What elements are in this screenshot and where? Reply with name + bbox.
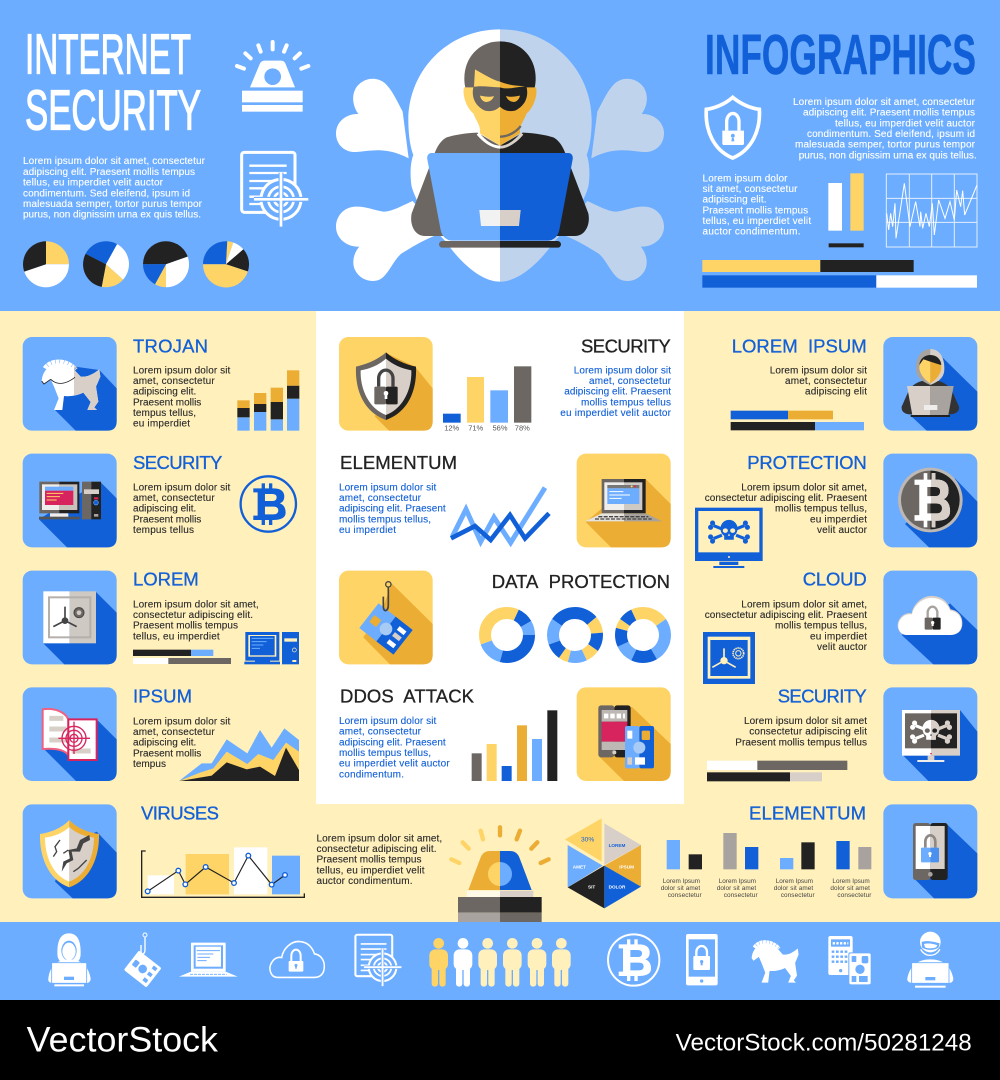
header left paragraph: Lorem ipsum dolor sit amet, consectetur [23,156,206,167]
text: Security centre: amet, consectetur [589,376,672,387]
text: Lorem Ipsum: amet, consectetur [785,376,868,387]
centre white panel [316,311,684,804]
progress bars: Lorem Ipsum [731,411,864,430]
hexagon diagram: DOLOR [609,884,626,889]
chart captions: consectetur [724,892,759,899]
text: Cloud: mollis tempus tellus, [775,621,867,632]
icon: hook and card white [124,933,162,988]
header right paragraph [793,97,977,161]
header small paragraph: adipiscing elit. [702,195,766,206]
heading: Elementum right: ELEMENTUM [749,802,866,823]
text: Elementum: adipiscing elit. Praesent [339,504,446,515]
text: Lorem Ipsum [770,365,868,398]
text: Lorem Ipsum: adipiscing elit [805,387,867,398]
hexagon diagram: IPSUM [619,865,634,870]
heading: Data Protection: DATA PROTECTION [492,571,670,592]
text: DDoS Attack: mollis tempus tellus, [339,748,431,759]
header left paragraph: malesuada semper, tortor purus tempor [23,199,203,210]
text: Security right: Praesent mollis tempus tellus [735,737,867,748]
text: Lorem Ipsum: Lorem ipsum dolor sit [770,365,867,376]
title: Internet Security: SECURITY [25,78,201,142]
text: DDoS Attack: eu imperdiet velit auctor [339,759,450,770]
text: Lorem: Lorem ipsum dolor sit amet, [133,599,259,610]
header small paragraph: Lorem ipsum dolor [702,173,788,184]
icon: blue desktop computer [244,632,299,664]
text: Trojan: adipiscing elit. [133,387,196,398]
icon tile: trojan horse [23,337,117,431]
icon: bitcoin white [608,934,659,986]
text: Protection: eu imperdiet [810,514,867,525]
icon: bitcoin outline [241,476,296,532]
header small paragraph: tellus, eu imperdiet velit [702,216,811,227]
header small paragraph: auctor condimentum. [702,227,800,238]
combo chart: bars and line [142,847,304,897]
heading: Lorem: LOREM [133,569,199,590]
zigzag line chart [451,488,549,543]
text: Cloud: velit auctor [817,642,868,653]
icon: laptop white [179,943,238,977]
bar chart with percentages: 78% [515,424,530,433]
header right paragraph: malesuada semper, tortor purus tempor [795,140,976,151]
panel: centre column [339,335,672,781]
panel: bottom strip [316,818,872,922]
chart captions: Lorem Ipsum [719,878,756,885]
text: Trojan: tempus tellus, [133,408,196,419]
donut charts [485,613,665,657]
heading: Ipsum: IPSUM [133,686,192,707]
heading: Viruses: VIRUSES [141,802,219,823]
bar chart with percentages: 71% [468,424,484,433]
heading: Elementum: ELEMENTUM [340,452,457,473]
text: Lorem: consectetur adipiscing elit. [133,610,253,621]
icon: shield with padlock [706,97,759,158]
middle cream panel [0,311,1000,922]
area chart [179,728,299,781]
icon tile: book with target [23,687,117,781]
people row [429,938,571,987]
text: Trojan: Lorem ipsum dolor sit [133,365,231,376]
text: Security right: Lorem ipsum dolor sit amet [744,716,867,727]
header line chart [886,174,977,247]
icon: monitor with skull [695,508,763,568]
text: Lorem: tellus, eu imperdiet [133,631,220,642]
footer icons [48,932,953,988]
icon tile: cloud with lock [883,571,977,664]
text: Ipsum [133,716,231,770]
heading: DDoS Attack: DDOS ATTACK [340,686,475,707]
footer icon strip panel [0,922,1000,1000]
hexagon diagram: LOREM [609,843,626,848]
icon tile: laptop [577,454,671,547]
grouped bar chart [667,833,871,869]
text: Security: adipiscing elit. [133,504,196,515]
icon: phone lock white [686,934,718,985]
pie charts row [23,241,249,287]
text: Cloud: eu imperdiet [810,631,867,642]
header right paragraph: condimentum. Sed eleifend, ipsum id [807,129,975,140]
progress bars: Lorem [133,650,231,664]
text: Security right: consectetur adipiscing elit [749,727,867,738]
heading: Cloud: CLOUD [803,569,867,590]
icon: document with target [242,152,308,227]
text: Trojan: Praesent mollis [133,397,201,408]
text: Trojan: amet, consectetur [133,376,215,387]
stacked bar chart [237,370,299,431]
text: bottom paragraph: Praesent mollis tempus [316,855,422,866]
chart captions: dolor sit amet [661,885,700,892]
header small paragraph: Praesent mollis tempus [702,205,808,216]
text: Trojan: eu imperdiet [133,419,190,430]
icon tile: cracked shield [23,804,117,898]
icon tile: desktop computer [23,454,117,547]
text: Cloud: Lorem ipsum dolor sit amet, [741,599,867,610]
text: Security centre: mollis tempus tellus [581,397,671,408]
header right paragraph: purus, non dignissim urna ex quis tellus. [799,150,977,161]
icon tile: safe [23,571,117,664]
icon: hooded hacker white [48,933,91,986]
text: Protection [705,482,868,536]
panel: left column [23,335,304,898]
text: Lorem: Praesent mollis tempus [133,621,238,632]
text: Elementum: Lorem ipsum dolor sit [339,482,437,493]
header small paragraph: sit amet, consectetur [702,184,798,195]
header right paragraph: Lorem ipsum dolor sit amet, consectetur [793,97,976,108]
text: Ipsum: Praesent mollis [133,748,201,759]
icon tile: phone with lock [883,804,977,898]
icon: coloured siren [451,827,549,922]
chart captions: Lorem Ipsum [776,878,813,885]
text: bottom paragraph: auctor condimentum. [316,876,412,887]
text: Ipsum: Lorem ipsum dolor sit [133,716,231,727]
heading: Protection: PROTECTION [747,452,867,473]
text: Security centre [560,365,672,419]
title: Internet Security: INTERNET [25,22,191,86]
header left paragraph: tellus, eu imperdiet velit auctor [23,178,164,189]
header bar chart [828,173,864,247]
header left paragraph: adipiscing elit. Praesent mollis tempus [23,167,195,178]
title: Internet Security [25,22,201,142]
chart captions: consectetur [781,892,816,899]
bar chart with percentages [443,366,531,433]
progress bars: Security right [707,761,847,781]
text: DDoS Attack: adipiscing elit. Praesent [339,737,446,748]
header background panel [0,0,1000,311]
icon tile: bitcoin coin [883,454,977,547]
text: Protection: consectetur adipiscing elit. Praesent [705,493,867,504]
text: Security: Lorem ipsum dolor sit [133,482,231,493]
text: bottom paragraph [316,833,442,887]
header left paragraph [23,156,206,221]
text: Security centre: adipiscing elit. Praesent [564,387,671,398]
header small paragraph [702,173,811,238]
icon: alarm siren white [237,42,308,112]
watermark: image id: VectorStock.com/50281248 [676,1030,972,1057]
heading: Security centre: SECURITY [581,335,671,356]
text: Security: tempus tellus [133,525,194,536]
text: Elementum: mollis tempus tellus, [339,514,431,525]
icon tile: monitor with skull [883,687,977,781]
chart captions: dolor sit amet [717,885,756,892]
text: DDoS Attack: amet, consectetur [339,727,422,738]
chart captions: Lorem Ipsum [663,878,700,885]
text: Protection: mollis tempus tellus, [775,504,867,515]
text: Security [133,482,231,536]
laptop [427,153,573,248]
icon tile: shield with lock [339,337,433,431]
text: Ipsum: adipiscing elit. [133,738,196,749]
text: Ipsum: tempus [133,759,166,770]
text: Trojan [133,365,231,430]
icon tile: hooded hacker [883,337,977,431]
icon: blue safe [703,632,755,684]
icon: phone and card white [828,936,872,985]
skull and crossbones backdrop [336,29,664,282]
heading: Trojan: TROJAN [133,335,208,356]
watermark: brand: VectorStock [27,1021,219,1060]
text: DDoS Attack: condimentum. [339,769,404,780]
text: Security: amet, consectetur [133,493,215,504]
text: bottom paragraph: consectetur adipiscing elit. [316,844,436,855]
header horizontal bars [702,260,977,288]
text: Security centre: Lorem ipsum dolor sit [574,365,671,376]
bar chart: DDoS [472,710,557,781]
chart captions: dolor sit amet [774,885,813,892]
text: Security: Praesent mollis [133,514,201,525]
text: DDoS Attack [339,716,450,780]
icon: trojan horse white [752,943,799,983]
text: Security right [735,716,867,748]
icon: cloud lock outline [270,942,324,977]
chart captions: consectetur [837,892,872,899]
chart captions: Lorem Ipsum [832,878,870,885]
heading: Lorem Ipsum: LOREM IPSUM [732,335,867,356]
icon: document target small [355,935,401,986]
text: Ipsum: amet, consectetur [133,727,215,738]
icon tile: phishing hook with card [339,571,433,664]
text: Cloud [705,599,868,653]
text: Cloud: consectetur adipiscing elit. Praesent [705,610,867,621]
panel: right column [695,335,977,898]
text: Elementum: amet, consectetur [339,493,422,504]
icon tile: phone and card [577,687,671,781]
bar chart with percentages: 12% [444,424,460,433]
text: Elementum [339,482,446,536]
text: bottom paragraph: Lorem ipsum dolor sit amet, [316,833,442,844]
header right paragraph: tellus, eu imperdiet velit auctor [835,118,976,129]
text: DDoS Attack: Lorem ipsum dolor sit [339,716,437,727]
hexagon diagram [565,818,641,908]
heading: Security: SECURITY [133,452,222,473]
text: Protection: velit auctor [817,525,868,536]
hacker figure [411,41,589,236]
text: Protection: Lorem ipsum dolor sit amet, [741,482,867,493]
heading: Security right: SECURITY [778,686,867,707]
hexagon diagram: AMET [573,865,586,870]
central hacker over skull and crossbones [336,29,664,282]
icon: masked hacker white [907,932,953,988]
bar chart with percentages: 56% [492,424,508,433]
text: Lorem [133,599,259,642]
hexagon diagram: 30% [581,836,594,843]
chart captions: consectetur [668,892,703,899]
chart captions [661,878,872,899]
chart captions: dolor sit amet [830,885,870,892]
text: Elementum: eu imperdiet [339,525,396,536]
text: Security centre: eu imperdiet velit auctor [560,408,672,419]
header left paragraph: condimentum. Sed eleifend, ipsum id [23,188,190,199]
header right paragraph: adipiscing elit. Praesent mollis tempus [803,108,975,119]
header left paragraph: purus, non dignissim urna ex quis tellus. [23,210,201,221]
text: bottom paragraph: tellus, eu imperdiet velit [316,865,425,876]
hexagon diagram: SIT [588,884,595,889]
watermark bar [0,1000,1000,1080]
